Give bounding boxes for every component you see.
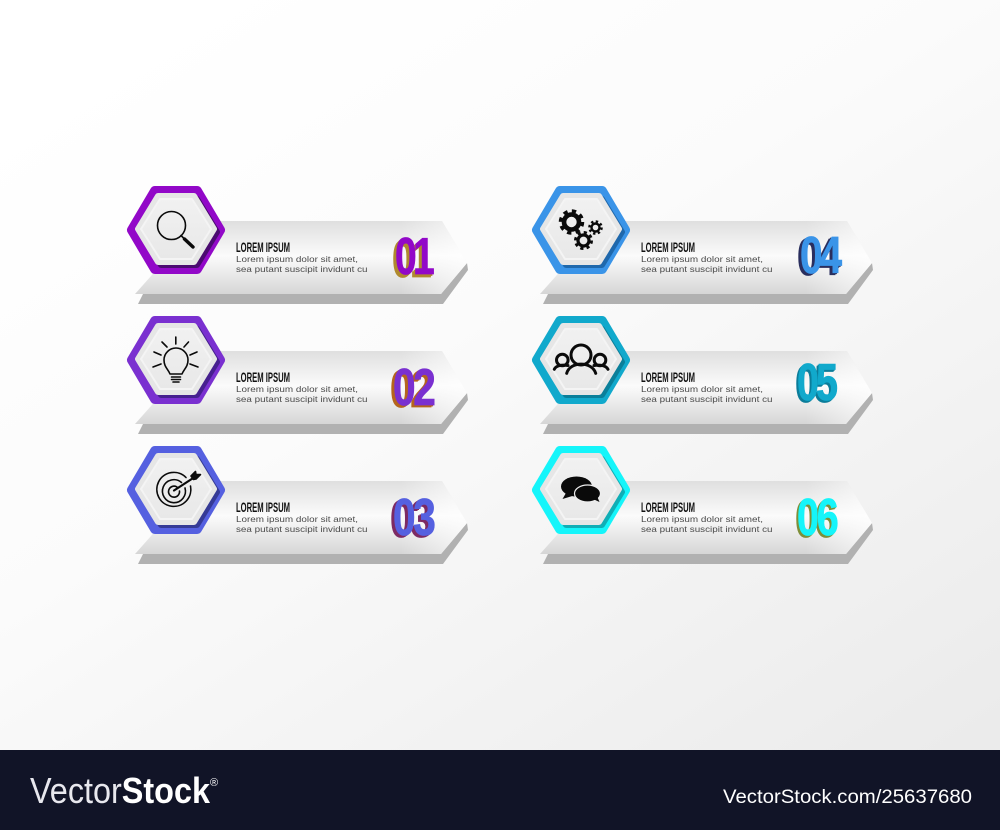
number 03: 03 xyxy=(392,489,434,547)
number 02: 02 xyxy=(390,360,433,418)
text block 03: sea putant suscipit invidunt cu xyxy=(236,524,368,534)
number 05: 05 xyxy=(795,355,836,413)
text block 05 xyxy=(641,370,773,404)
arrow band 03 xyxy=(135,481,468,564)
hexagon 06 xyxy=(537,451,625,529)
number 05: 05 xyxy=(797,353,838,411)
text block 06: LOREM IPSUM xyxy=(641,500,695,515)
panel: item 05 xyxy=(537,321,873,434)
number 01: 01 xyxy=(395,226,435,285)
text block 01: sea putant suscipit invidunt cu xyxy=(236,264,368,274)
hexagon 04 xyxy=(537,191,625,269)
number 06: 06 xyxy=(796,489,838,547)
number 05: 05 xyxy=(796,354,837,412)
icon: gears xyxy=(560,211,602,248)
panel: item 06 xyxy=(537,451,873,564)
arrow band 06 xyxy=(540,481,873,564)
panel: item 04 xyxy=(537,191,873,304)
text block 04 xyxy=(641,240,773,274)
text block 01: LOREM IPSUM xyxy=(236,240,290,255)
text block 02: sea putant suscipit invidunt cu xyxy=(236,394,368,404)
footer logo: VectorStock xyxy=(30,770,211,811)
text block 02: LOREM IPSUM xyxy=(236,370,290,385)
panel: item 02 xyxy=(132,321,468,434)
arrow band 05 xyxy=(540,351,873,434)
number 06: 06 xyxy=(795,490,837,548)
text block 04: LOREM IPSUM xyxy=(641,240,695,255)
text block 05: LOREM IPSUM xyxy=(641,370,695,385)
text block 06: sea putant suscipit invidunt cu xyxy=(641,524,773,534)
text block 04: Lorem ipsum dolor sit amet, xyxy=(641,254,763,264)
number 01: 01 xyxy=(394,228,433,287)
icon: magnifier xyxy=(158,212,193,247)
text block 03: Lorem ipsum dolor sit amet, xyxy=(236,514,358,524)
text block 01 xyxy=(236,240,368,274)
arrow band 01 xyxy=(135,221,468,304)
number 06: 06 xyxy=(797,488,839,546)
text block 03 xyxy=(236,500,368,534)
arrow band 02 xyxy=(135,351,468,434)
footer registered mark: ® xyxy=(210,777,218,789)
hexagon 03 xyxy=(132,451,220,529)
icon: target with dart xyxy=(157,472,200,506)
icon: people xyxy=(554,345,608,373)
panel: item 03 xyxy=(132,451,468,564)
number 02: 02 xyxy=(392,359,434,417)
text block 04: sea putant suscipit invidunt cu xyxy=(641,264,773,274)
number 04: 04 xyxy=(798,227,841,285)
hexagon 01 xyxy=(132,191,220,269)
text block 02: Lorem ipsum dolor sit amet, xyxy=(236,384,358,394)
footer bar xyxy=(0,750,1000,830)
panel: item 01 xyxy=(132,191,468,304)
hexagon 05 xyxy=(537,321,625,399)
arrow band 04 xyxy=(540,221,873,304)
icon: chat bubbles xyxy=(561,476,600,502)
number 03: 03 xyxy=(390,490,433,548)
icon: light bulb xyxy=(153,337,198,382)
text block 03: LOREM IPSUM xyxy=(236,500,290,515)
number 02: 02 xyxy=(393,358,436,416)
hexagon 02 xyxy=(132,321,220,399)
text block 05: sea putant suscipit invidunt cu xyxy=(641,394,773,404)
text block 06 xyxy=(641,500,773,534)
text block 02 xyxy=(236,370,368,404)
number 01: 01 xyxy=(392,229,432,288)
number 04: 04 xyxy=(797,228,839,286)
text block 06: Lorem ipsum dolor sit amet, xyxy=(641,514,763,524)
number 03: 03 xyxy=(393,488,436,546)
number 04: 04 xyxy=(800,226,842,284)
footer url: VectorStock.com/25637680 xyxy=(723,787,972,808)
text block 01: Lorem ipsum dolor sit amet, xyxy=(236,254,358,264)
text block 05: Lorem ipsum dolor sit amet, xyxy=(641,384,763,394)
